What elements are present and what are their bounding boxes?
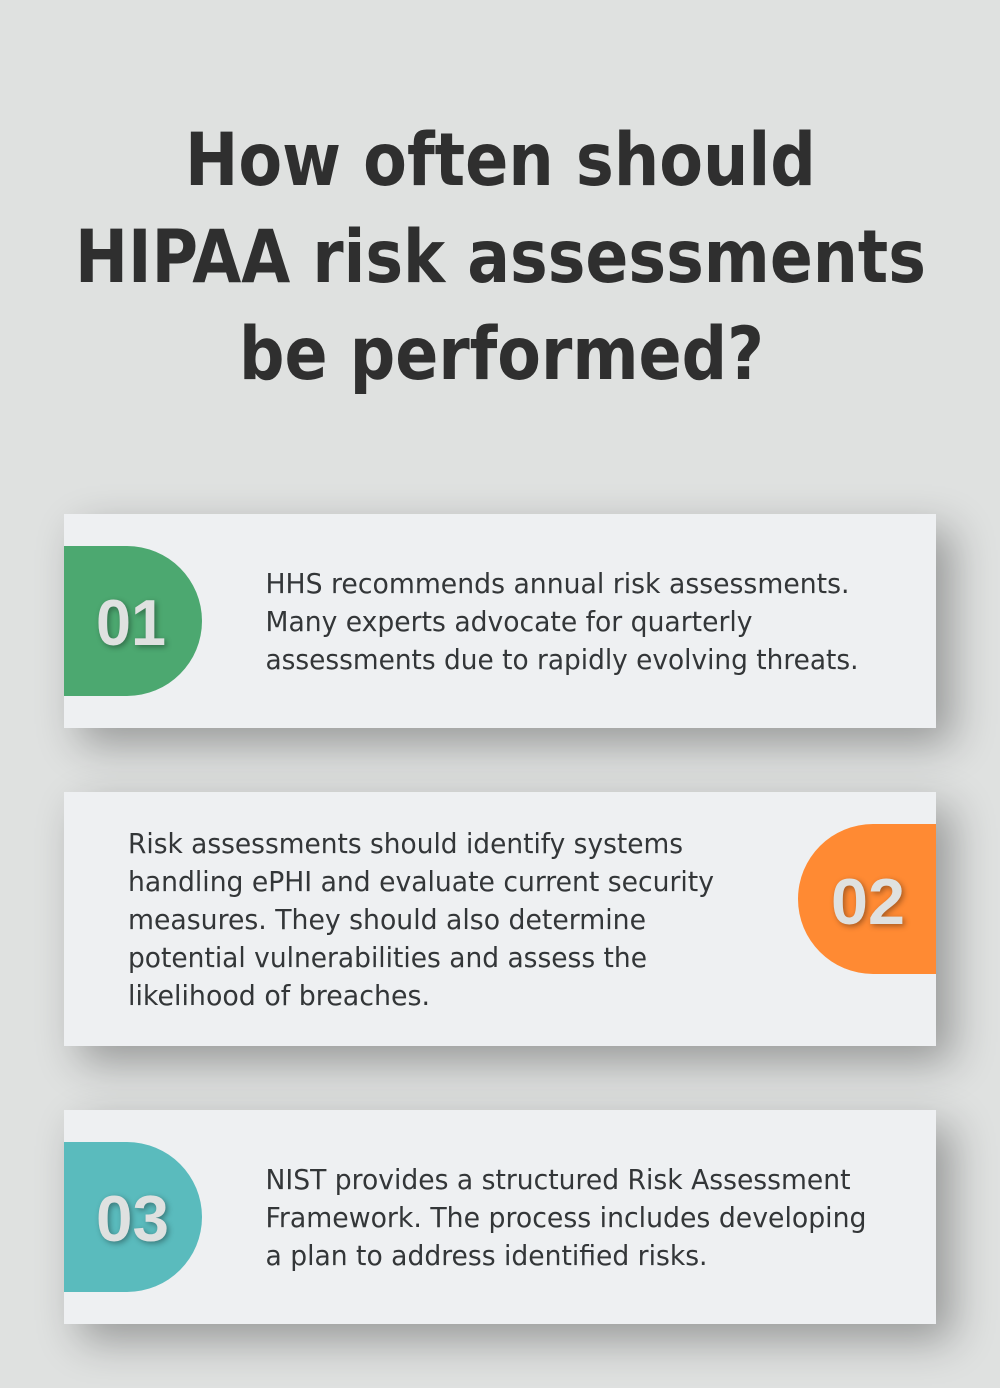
text: step 02 description: measures. They should also determine <box>128 903 646 936</box>
title: HIPAA risk assessments <box>75 214 926 299</box>
text: step 02 description: Risk assessments should identify systems <box>128 827 683 860</box>
text: step 03 description: NIST provides a structured Risk Assessment <box>266 1163 851 1196</box>
badge: 01 green pill <box>64 546 202 696</box>
text: step 01 description <box>266 567 858 676</box>
title <box>75 117 926 396</box>
text: step 01 description: assessments due to rapidly evolving threats. <box>266 643 858 676</box>
panel: step 03 <box>64 1110 936 1324</box>
number 02: 02 <box>831 865 905 938</box>
title: be performed? <box>239 311 764 396</box>
text: step 01 description: Many experts advocate for quarterly <box>266 605 752 638</box>
text: step 02 description: handling ePHI and evaluate current security <box>128 865 714 898</box>
text: step 02 description: potential vulnerabilities and assess the <box>128 941 647 974</box>
text: step 03 description: Framework. The process includes developing <box>266 1201 866 1234</box>
panel: step 02 <box>64 792 936 1046</box>
title: How often should <box>185 117 816 202</box>
number 01: 01 <box>96 586 166 659</box>
text: step 03 description: a plan to address identified risks. <box>266 1239 708 1272</box>
badge: 03 teal pill <box>64 1142 202 1292</box>
number 03: 03 <box>96 1182 169 1255</box>
text: step 03 description <box>266 1163 866 1272</box>
text: step 01 description: HHS recommends annual risk assessments. <box>266 567 850 600</box>
text: step 02 description <box>128 827 714 1012</box>
panel: step 01 <box>64 514 936 728</box>
badge: 02 orange pill <box>798 824 936 974</box>
text: step 02 description: likelihood of breaches. <box>128 979 430 1012</box>
